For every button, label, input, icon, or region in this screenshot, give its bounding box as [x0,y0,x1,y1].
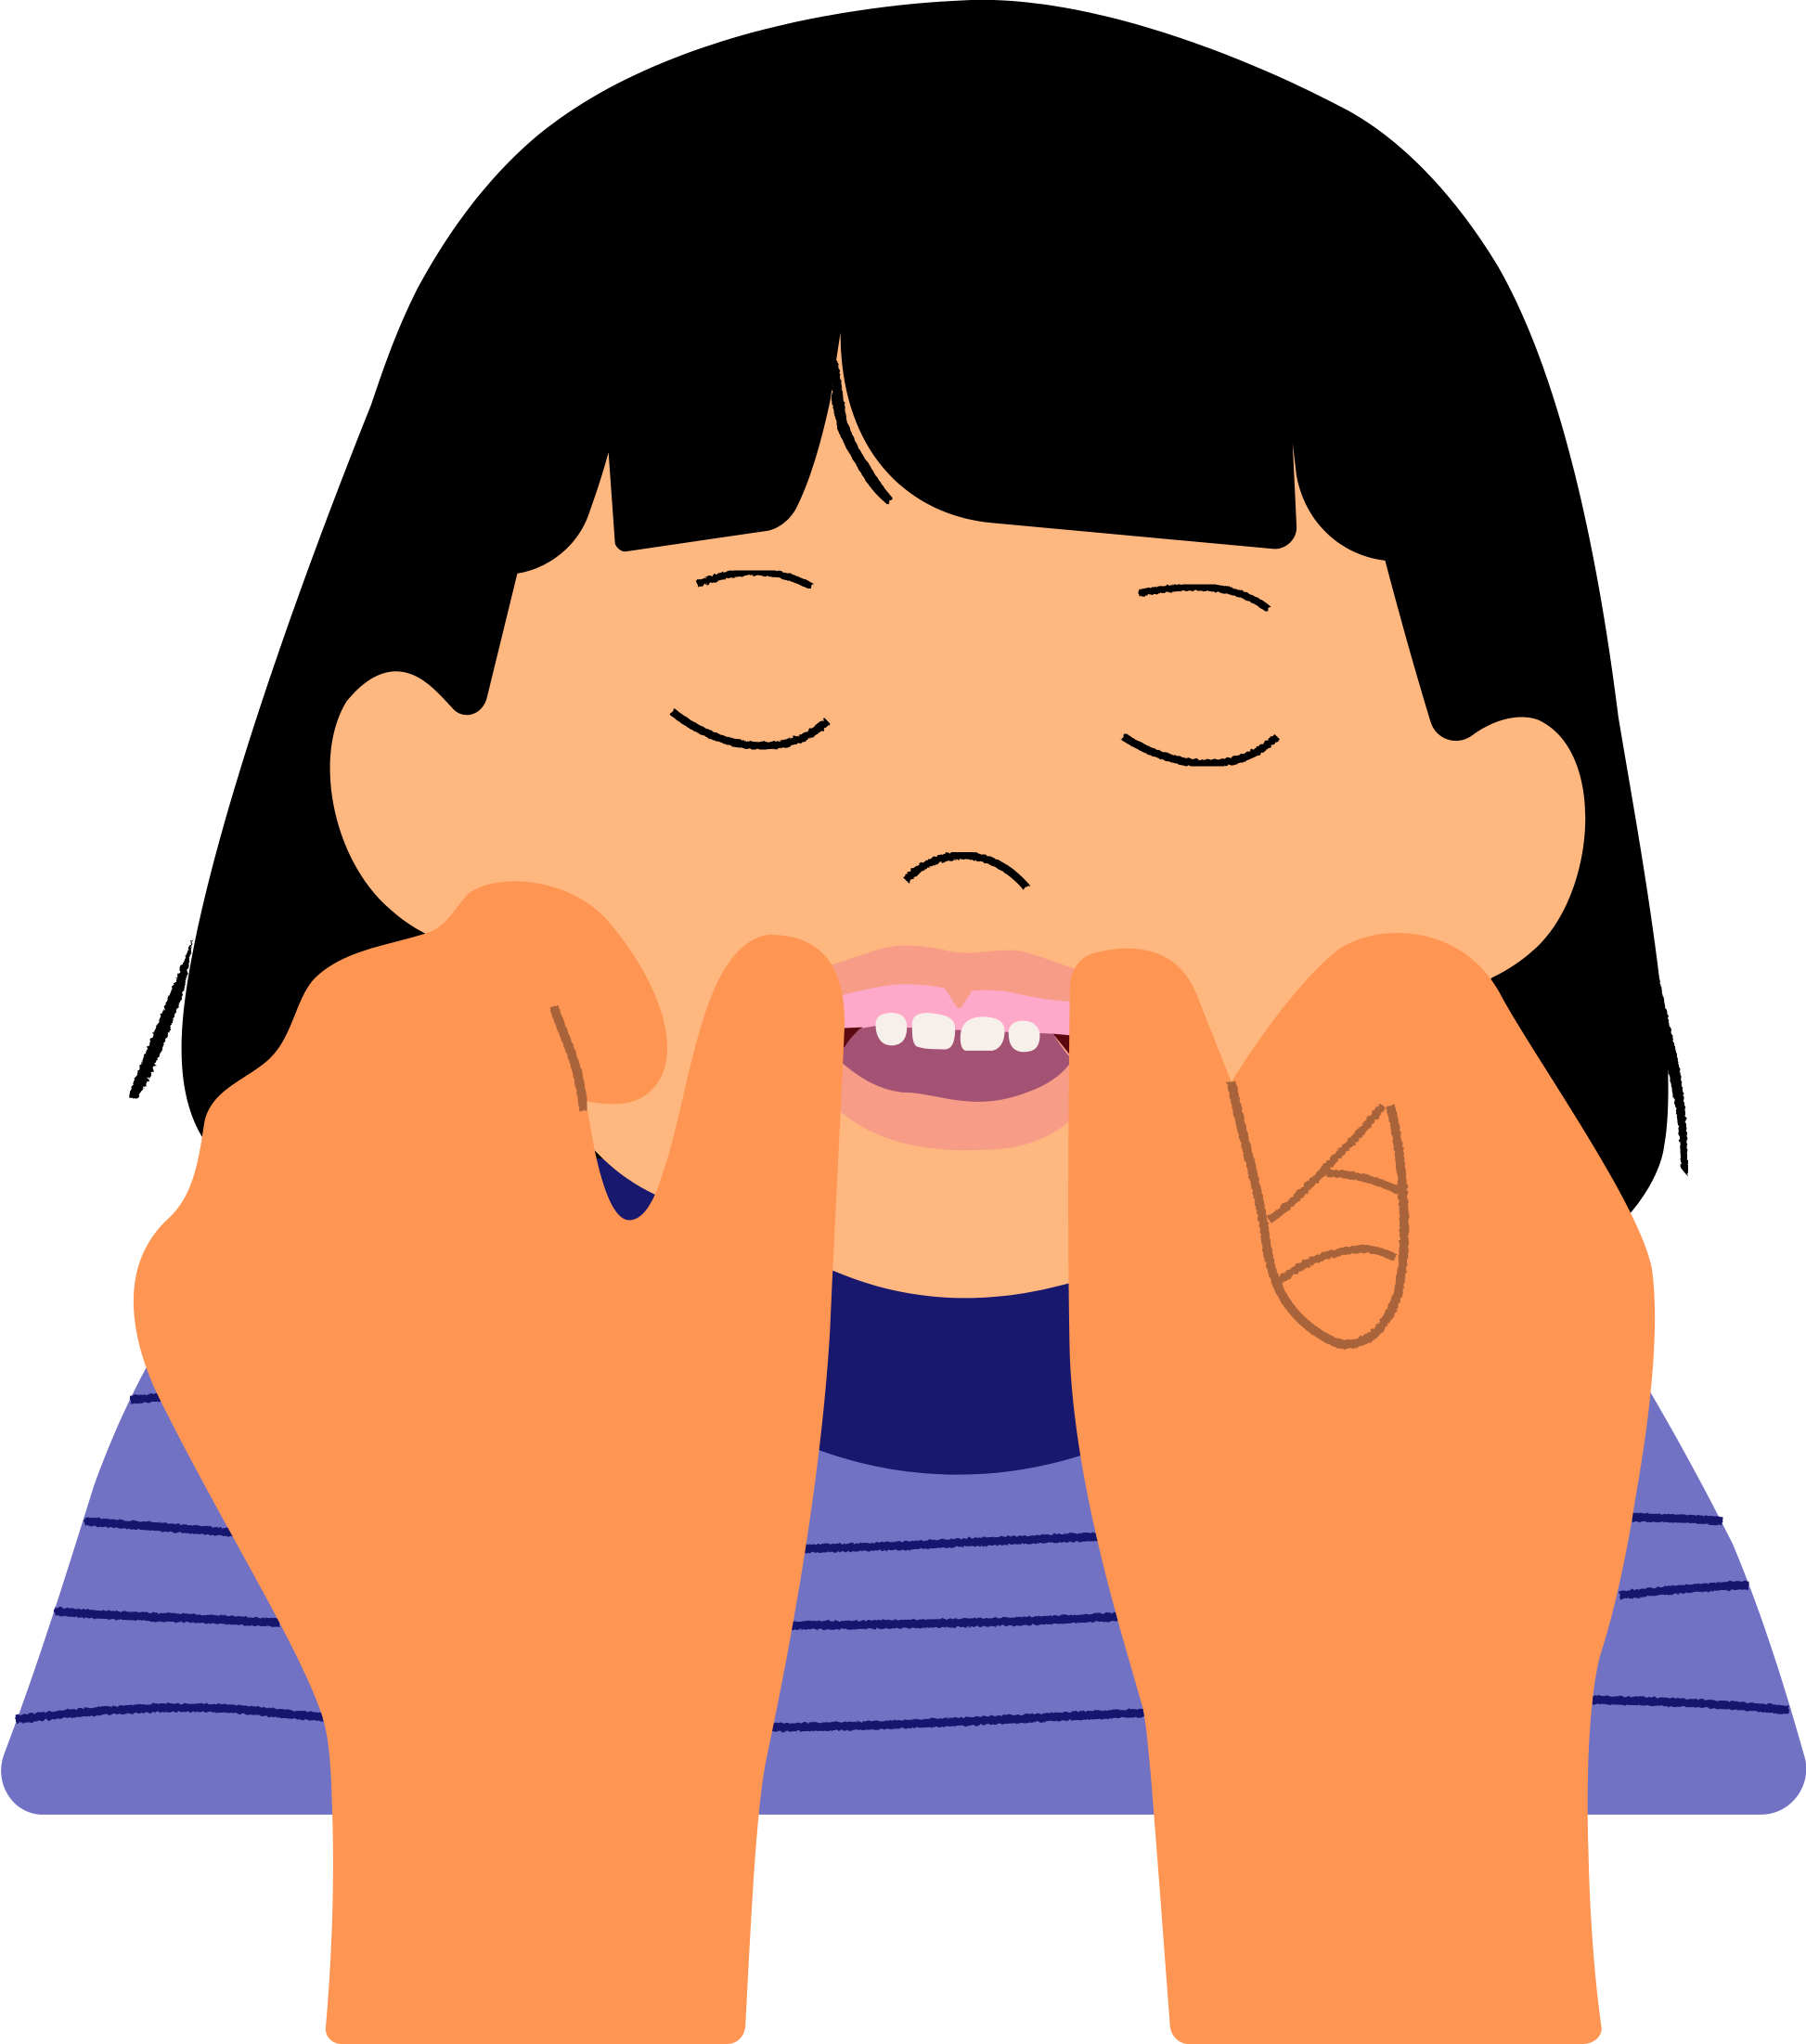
hair [129,0,1687,1215]
left dark mouth corner [834,1028,862,1058]
face [330,332,1585,1298]
mouth [821,946,1088,1150]
teeth [876,1013,1039,1052]
right eyebrow [1139,587,1268,609]
shirt stripes [16,1396,1789,1727]
nose [906,856,1026,887]
right thumb outline [1232,1082,1404,1344]
right closed eye [1123,736,1277,763]
inner mouth [834,1026,1073,1102]
gums [834,984,1081,1039]
right dark mouth corner [1052,1034,1081,1069]
forehead hair strand [832,352,893,504]
shirt [1,1316,1806,1815]
left eyebrow [697,572,812,587]
left closed eye [672,712,828,746]
left hand [134,881,845,2044]
frenulum [945,988,972,1008]
right stray hair strand [1658,971,1687,1176]
right hand [1068,933,1655,2044]
lips [821,946,1088,1150]
collar [561,1121,1303,1475]
left thumb crease [554,1006,584,1110]
left stray hair strand [129,938,193,1099]
